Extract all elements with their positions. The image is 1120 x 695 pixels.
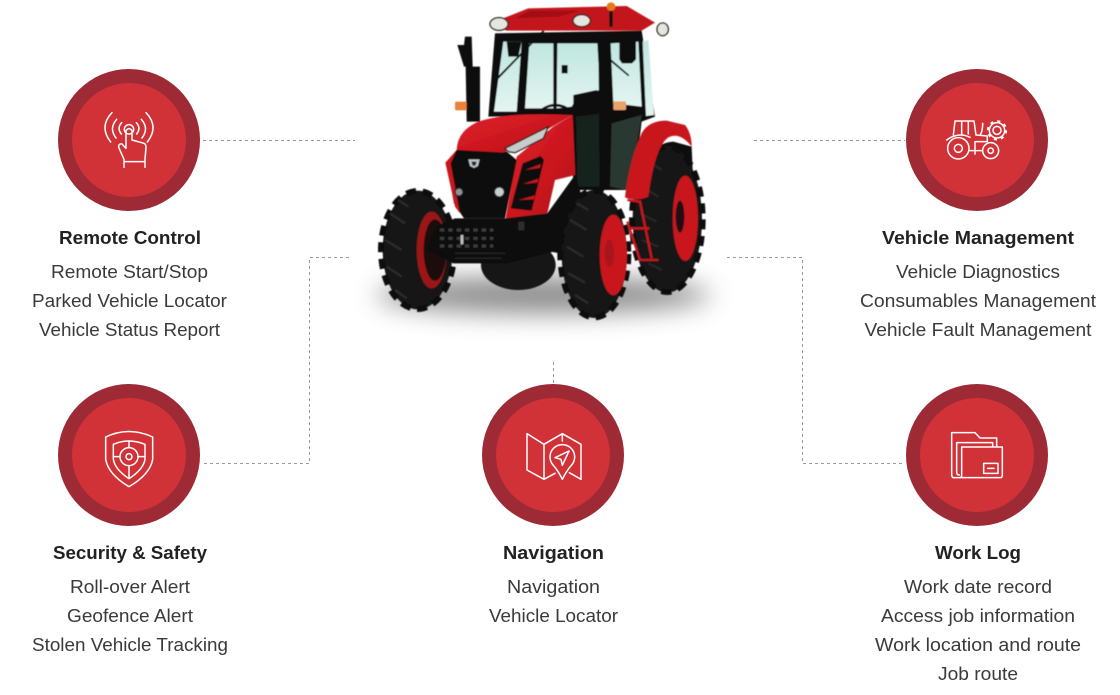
feature list: remote control: Remote Start/Stop <box>51 261 208 282</box>
cab body <box>488 31 655 190</box>
engine underside <box>507 175 587 253</box>
panel: navigation <box>482 384 624 626</box>
front left wheel <box>381 191 454 309</box>
badge: vehicle management <box>906 69 1048 211</box>
bonnet <box>457 114 573 153</box>
feature list: work log <box>875 576 1081 684</box>
icon: shield with target <box>106 431 153 487</box>
front axle and weights <box>427 218 560 263</box>
access steps <box>627 200 658 260</box>
badge: remote control <box>58 69 200 211</box>
feature list: navigation: Navigation <box>507 576 600 597</box>
icon: folders <box>952 433 1002 478</box>
cab pillars and seat <box>496 30 636 190</box>
icon: map with pin <box>527 434 581 479</box>
side marker lamps <box>455 101 626 110</box>
connector: vehicle management <box>754 140 905 142</box>
feature list: vehicle management: Vehicle Diagnostics <box>896 261 1060 282</box>
front right wheel <box>560 190 628 318</box>
roof work lights <box>490 15 668 36</box>
icon: hand pressing remote signal <box>105 113 153 167</box>
cab roof <box>489 6 655 31</box>
rear left wheel, far side <box>481 240 556 290</box>
panel: security and safety <box>32 384 228 655</box>
badge: navigation <box>482 384 624 526</box>
feature list: security and safety: Roll-over Alert <box>70 576 190 597</box>
tractor illustration <box>381 2 703 318</box>
red nose trim <box>445 150 460 213</box>
feature list: navigation: Vehicle Locator <box>489 605 618 626</box>
amber beacon <box>607 2 615 27</box>
feature list: work log: Work location and route <box>875 634 1081 655</box>
heading: work log: Work Log <box>935 542 1021 563</box>
feature list: vehicle management: Vehicle Fault Management <box>864 319 1092 340</box>
feature list: remote control <box>32 261 227 340</box>
rear right wheel <box>632 142 703 293</box>
panel: work log <box>875 384 1081 684</box>
feature list: vehicle management <box>860 261 1096 340</box>
connector: navigation <box>552 362 554 384</box>
badge: security and safety <box>58 384 200 526</box>
feature list: security and safety: Geofence Alert <box>67 605 193 626</box>
grille <box>447 149 517 218</box>
headlight <box>505 127 548 153</box>
icon: tractor with gear <box>947 121 1006 159</box>
feature list: navigation <box>489 576 618 626</box>
panel: vehicle management <box>860 69 1096 340</box>
feature list: security and safety: Stolen Vehicle Tracking <box>32 634 228 655</box>
feature list: work log: Job route <box>938 663 1018 684</box>
lower cab interior <box>576 113 642 190</box>
feature list: remote control: Vehicle Status Report <box>39 319 220 340</box>
connector: remote control <box>203 140 355 142</box>
feature list: security and safety <box>32 576 228 655</box>
engine side <box>506 115 575 218</box>
feature list: work log: Work date record <box>904 576 1052 597</box>
feature list: remote control: Parked Vehicle Locator <box>32 290 227 311</box>
tractor ground shadow <box>377 277 710 313</box>
feature list: vehicle management: Consumables Management <box>860 290 1096 311</box>
rear fender <box>625 121 692 200</box>
heading: remote control: Remote Control <box>59 227 201 248</box>
exhaust stack <box>457 37 480 122</box>
connector: security and safety <box>204 258 352 464</box>
roof hatch <box>515 11 580 18</box>
heading: navigation: Navigation <box>503 542 604 563</box>
connector: work log <box>727 258 905 464</box>
badge and fog lights <box>455 159 504 197</box>
feature list: work log: Access job information <box>881 605 1075 626</box>
panel: remote control <box>32 69 227 340</box>
side vent <box>511 156 544 211</box>
cab windows <box>494 40 654 116</box>
heading: vehicle management: Vehicle Management <box>882 227 1074 248</box>
badge: work log <box>906 384 1048 526</box>
heading: security and safety: Security & Safety <box>53 542 208 563</box>
